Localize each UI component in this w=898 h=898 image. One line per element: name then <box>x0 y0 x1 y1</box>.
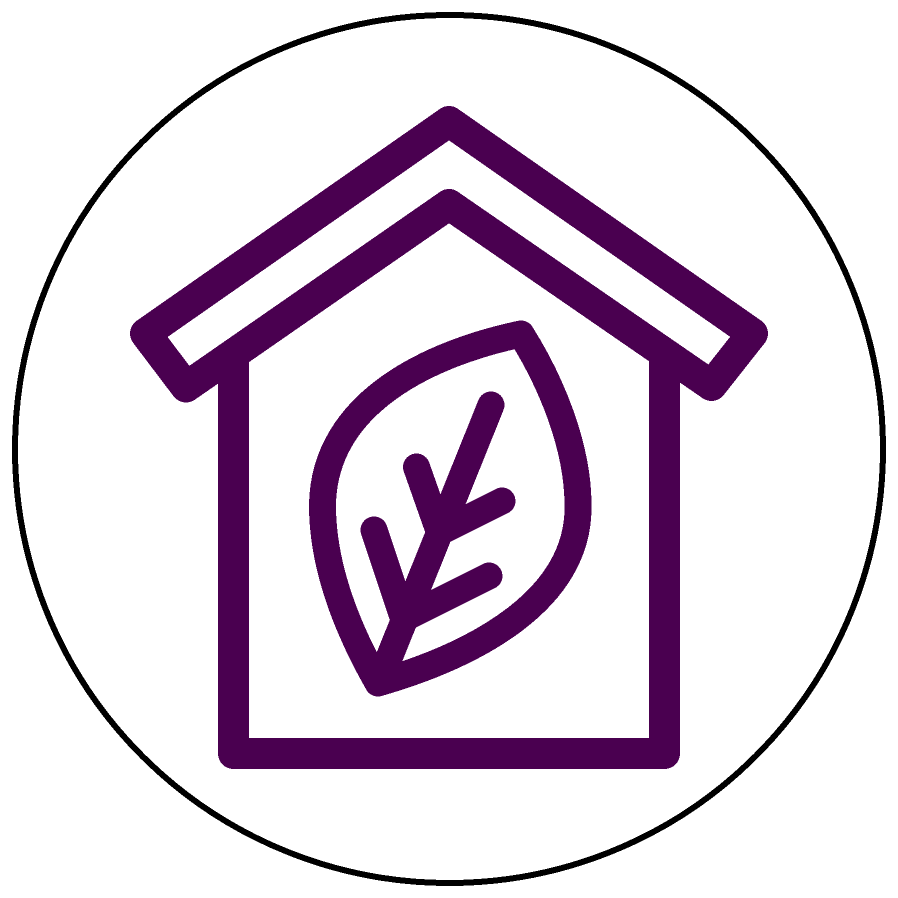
leaf stem <box>385 405 491 668</box>
leaf vein: upper right <box>444 501 502 530</box>
house walls <box>234 358 664 754</box>
leaf vein: lower right <box>409 576 489 616</box>
leaf vein: upper left <box>416 467 438 528</box>
roof <box>146 122 752 387</box>
icon: leaf <box>322 334 578 683</box>
leaf vein: lower left <box>374 530 402 614</box>
leaf outline <box>322 334 578 683</box>
icon: house <box>146 122 752 754</box>
